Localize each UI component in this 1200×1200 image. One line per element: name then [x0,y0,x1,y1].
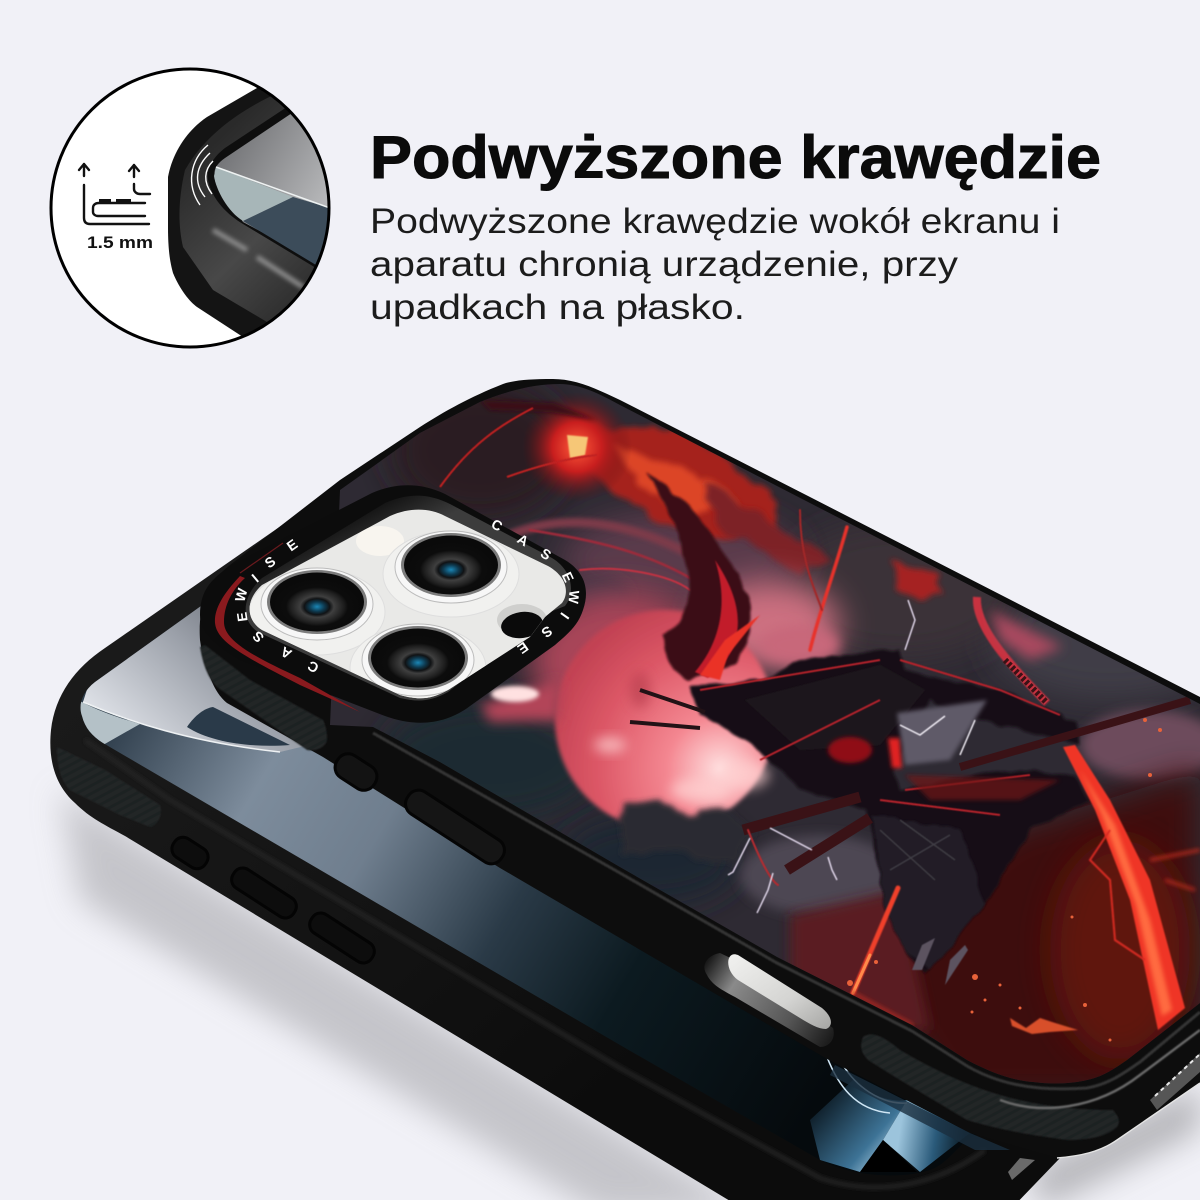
art: background cloud tones [380,380,1200,1100]
art: samurai figure armour [690,648,1090,975]
flash [356,526,404,556]
wallpaper swirl bottom [810,1057,970,1172]
button: volume down [306,909,378,967]
speaker holes highlight [1155,1054,1200,1096]
art: red blade [1063,745,1200,1030]
lower case corner carbon panel [57,747,161,827]
camera bump [200,485,586,723]
brand lettering around rim: E [284,536,300,554]
lens: top right [395,531,507,603]
printed artwork on case [330,380,1200,1100]
art: crossed swords [630,690,1190,870]
art: lightning [728,600,915,913]
brand lettering around rim: E [233,611,251,623]
art: pink cloud upper right [990,610,1063,660]
wallpaper white arc [83,702,280,752]
speaker cutout [1150,1053,1200,1110]
icon: raised edge height diagram [79,164,150,224]
brand lettering around rim: A [278,644,294,662]
art: feather wing [647,473,840,680]
lower case inner bevel [85,740,985,1187]
art edge bevel [373,733,1200,1089]
brand lettering around rim: W [232,586,251,603]
lower phone screen [80,606,964,1172]
art: lightning window behind figure [897,700,987,765]
art: moon light flare [480,680,560,722]
plate contents [249,526,547,711]
wallpaper pale teal wedge [78,700,140,745]
button: volume up [228,864,300,922]
upper case button small [330,749,382,795]
lidar pale ring [497,604,547,636]
plate lens halos [249,531,519,711]
bump outer wall [200,485,586,723]
brand lettering around rim: W [565,590,583,605]
art: purple streak band [510,523,710,590]
art: big blood moon [555,610,775,830]
brand lettering around rim: S [538,545,554,563]
bump upper red hairline [240,543,283,573]
charging port surround [704,953,834,1047]
wallpaper dark blob [187,707,290,746]
art: moon mottling [594,672,769,802]
brand lettering around rim [232,516,583,676]
description text: Podwyższone krawędzie wokół ekranu i [370,202,1060,241]
brand lettering around rim: E [515,639,531,657]
description text [370,202,1060,327]
wallpaper grey wedge [83,606,302,752]
bump red art sliver [215,576,360,712]
brand lettering around rim: S [262,553,278,571]
lower phone: front with screen in black case [50,470,1060,1200]
bottom rim glossy highlight [1000,1030,1200,1108]
inset: raised edge arcs [192,145,213,205]
lidar hole [501,612,542,638]
art: dark clouds below moon [620,800,755,865]
lower case frame [50,478,1060,1200]
icon label: 1.5 mm: 1.5 mm [87,234,153,252]
upper case button long [401,786,509,868]
lens: bottom [362,624,474,696]
art: upper red glow, flames and sun spot [440,392,945,597]
art: haze upper right of moon [700,580,840,670]
inset: case corner detail [168,60,340,340]
brand lettering around rim: S [249,628,267,646]
art: pink haze [530,590,710,730]
outer white rim highlight [1057,1083,1200,1158]
camera plate [250,510,566,698]
brand lettering around rim: S [539,623,555,641]
description text: upadkach na płasko. [370,288,745,327]
button: small lower [168,833,212,873]
upper case body [200,379,1200,1158]
brand lettering around rim: E [559,569,577,585]
brand lettering around rim: A [515,531,531,549]
phone drop shadows [60,790,1200,1200]
art: red sword handle [977,597,1047,703]
brand lettering around rim: C [489,516,505,534]
art: embers [847,718,1162,1042]
art: ember patch [1010,1018,1078,1034]
description text: aparatu chronią urządzenie, przy [370,245,959,284]
zoom circle inset [51,60,340,347]
brand lettering around rim: C [305,658,321,676]
bump side carbon panel [200,645,327,750]
brand lettering around rim: I [248,571,262,585]
lens: left [261,568,373,640]
bump inner lip [246,496,571,700]
silver side button [728,954,831,1029]
brand lettering around rim: I [557,610,573,622]
art: thin red streaks [748,510,912,1025]
upper phone: back case [200,379,1200,1158]
title: Podwyższone krawędzie [370,124,1101,191]
translucent blue band under case [830,1065,1010,1150]
carbon panel bottom [861,1034,1119,1140]
art: lower body shards [912,938,968,985]
case metal cutout bottom right [1008,1158,1035,1180]
